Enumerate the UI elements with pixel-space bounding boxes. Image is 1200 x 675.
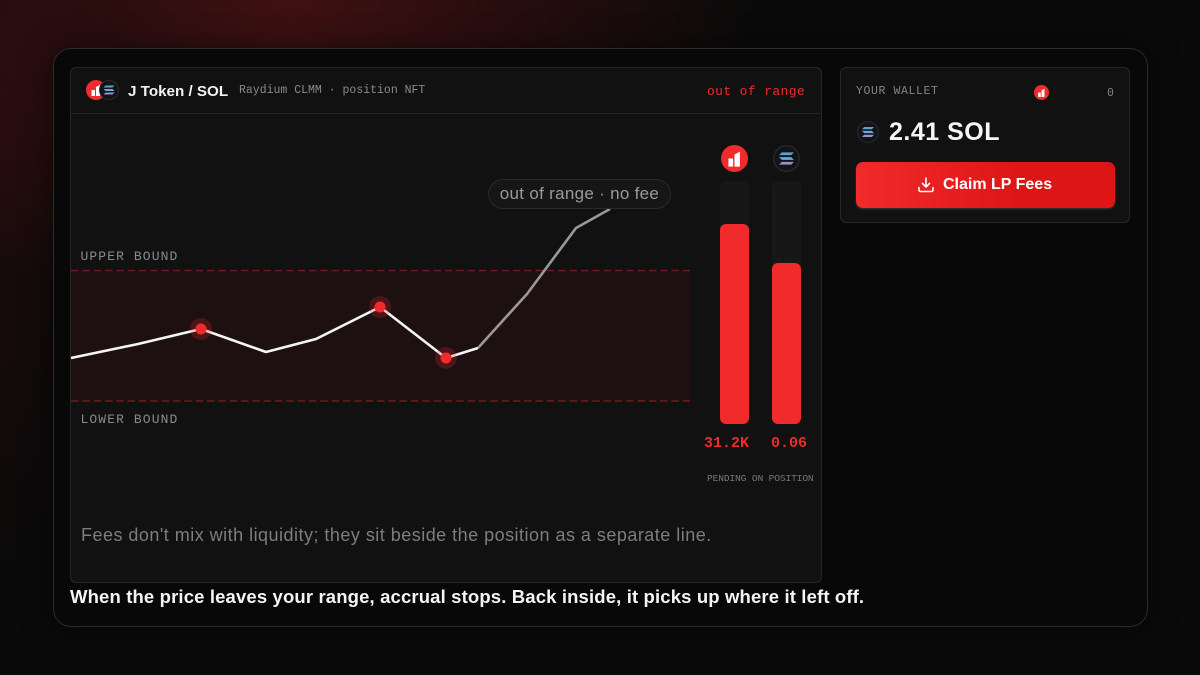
button: claim LP fees xyxy=(856,162,1115,208)
value: J token: 31.2K xyxy=(704,435,749,452)
panel header xyxy=(71,68,821,114)
caption: When the price leaves your range, accrual stops. Back inside, it picks up where it left off. xyxy=(70,586,864,607)
pair subtitle: Raydium CLMM · position NFT xyxy=(239,84,425,97)
icon: J token bar xyxy=(721,145,748,172)
button text: Claim LP Fees xyxy=(943,176,1052,193)
bar: SOL fees xyxy=(772,181,801,424)
upper bound label: UPPER BOUND xyxy=(80,249,178,264)
icon: SOL token xyxy=(99,80,119,100)
fee markers xyxy=(190,296,457,369)
bar: J token fees xyxy=(720,181,749,424)
J token balance: 0 xyxy=(1107,87,1114,100)
price line in range xyxy=(71,307,478,358)
outer frame xyxy=(53,48,1148,627)
range band xyxy=(71,271,690,401)
panel: position chart xyxy=(70,67,822,583)
status: out of range: out of range xyxy=(707,84,805,99)
callout: out of range no fee: out of range · no fee xyxy=(500,184,659,203)
icon: SOL wallet xyxy=(857,121,879,143)
SOL balance: 2.41 SOL xyxy=(889,118,1000,146)
footnote: Fees don't mix with liquidity; they sit beside the position as a separate line. xyxy=(81,525,712,545)
value: SOL: 0.06 xyxy=(771,435,807,452)
label: pending on position: PENDING ON POSITION xyxy=(707,473,814,484)
wallet label: YOUR WALLET xyxy=(856,85,939,98)
callout: out of range no fee xyxy=(488,179,671,209)
icon: download xyxy=(918,177,934,192)
panel: wallet xyxy=(840,67,1130,223)
lower bound label: LOWER BOUND xyxy=(80,412,178,427)
pair title: J Token / SOL xyxy=(128,83,228,100)
price line out of range xyxy=(478,209,610,348)
icon: J token xyxy=(86,80,102,100)
icon: SOL bar xyxy=(773,145,800,172)
icon: J token wallet xyxy=(1034,85,1049,100)
